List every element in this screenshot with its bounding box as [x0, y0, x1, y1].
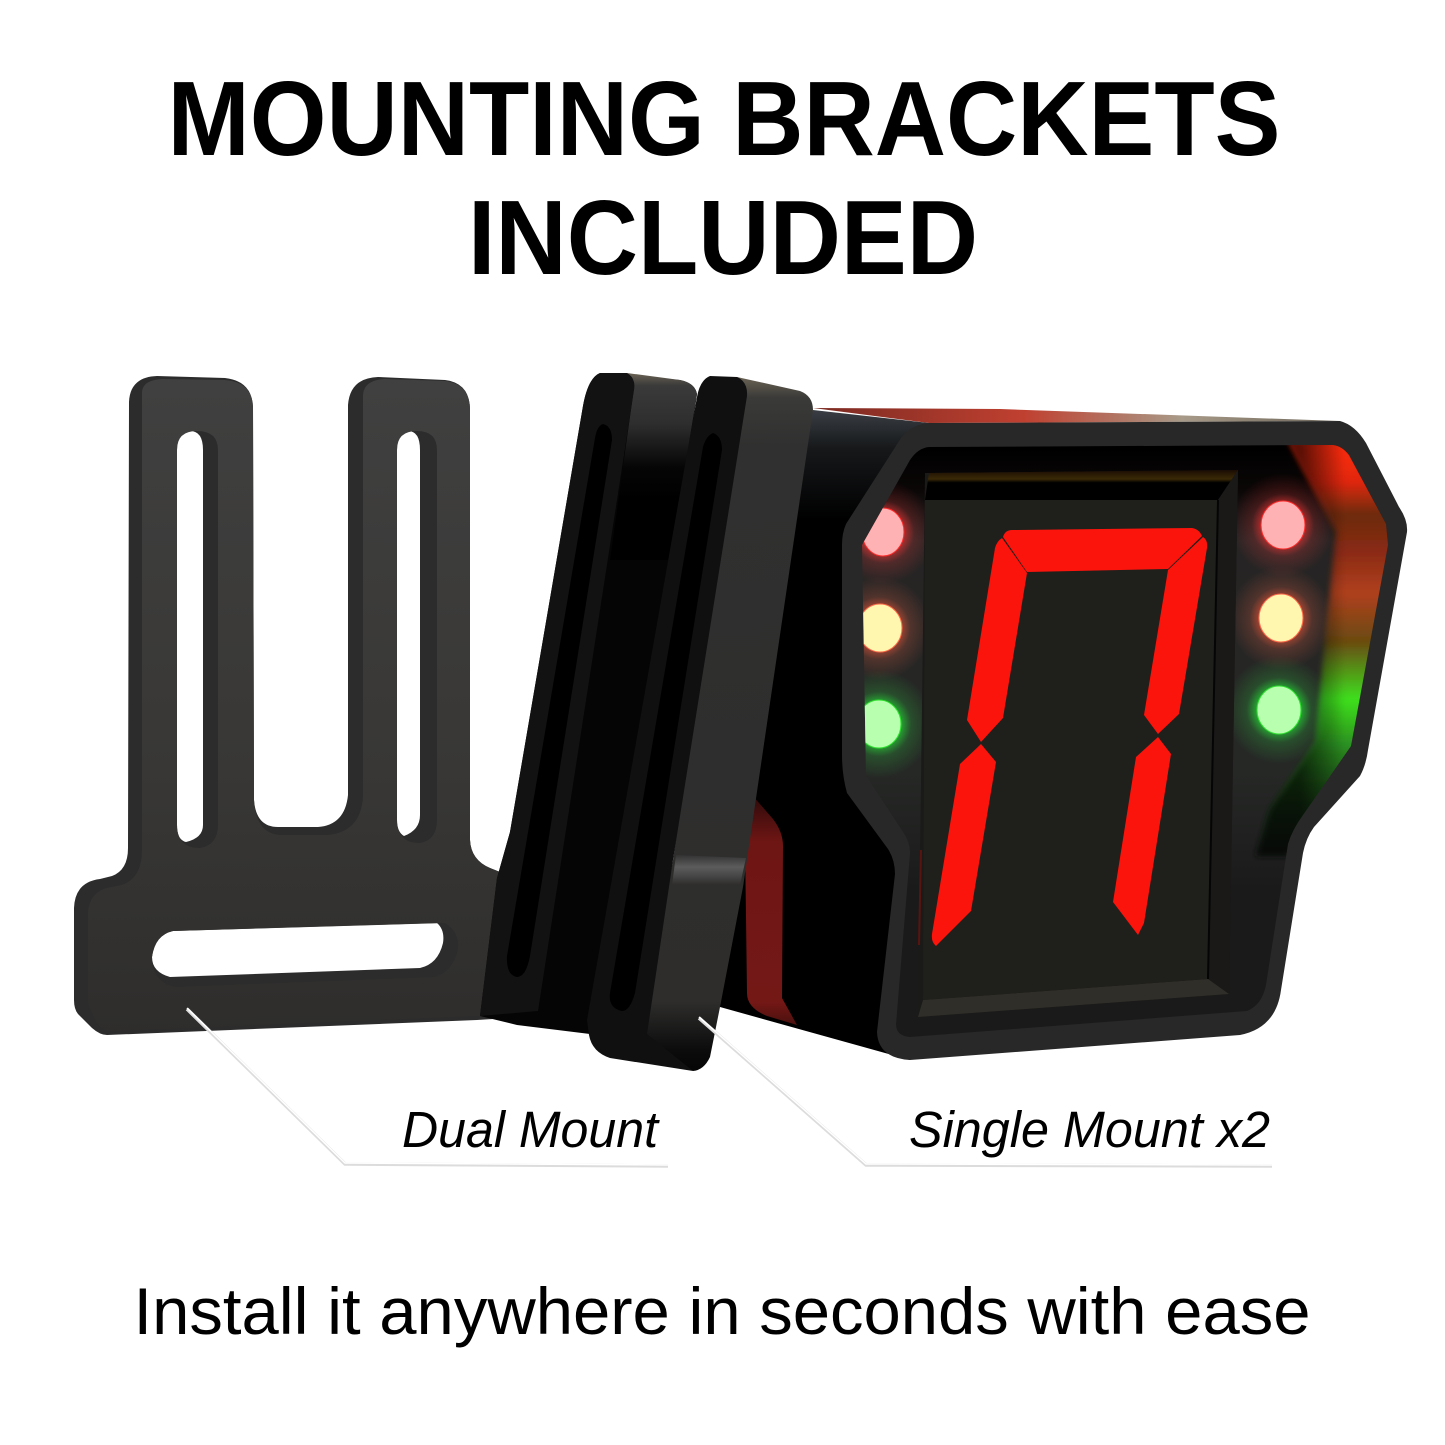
front single mount	[587, 376, 813, 1071]
front mount side	[640, 377, 813, 1071]
title	[168, 60, 1280, 297]
front mount face	[587, 376, 747, 1071]
single mount brackets	[480, 373, 813, 1071]
bracket edge	[74, 376, 510, 1035]
seven-segment digit 7	[932, 528, 1207, 946]
callout: single mount x2	[699, 1017, 1272, 1166]
front mount highlight	[672, 855, 746, 885]
leader line	[187, 1008, 668, 1166]
right LEDs	[1257, 501, 1305, 734]
front mount slot	[610, 433, 722, 1011]
front bezel	[842, 421, 1407, 1060]
coloured light channel	[1270, 445, 1388, 814]
dual mount bracket	[74, 376, 510, 1035]
rear mount slot	[507, 424, 612, 977]
device body side	[700, 410, 960, 1060]
inner recess and lights	[862, 445, 1388, 1037]
callout: dual mount: Dual Mount	[402, 1101, 660, 1158]
red side stripe	[745, 796, 797, 1025]
callout: single mount x2: Single Mount x2	[909, 1101, 1270, 1158]
tagline: Install it anywhere in seconds with ease	[134, 1274, 1310, 1348]
left LEDs	[863, 508, 904, 748]
bracket face	[88, 379, 510, 1031]
callout: dual mount	[187, 1008, 668, 1166]
right LED glows	[1234, 476, 1330, 760]
display window	[918, 470, 1238, 1017]
recess panel	[884, 445, 1363, 1037]
title: MOUNTING BRACKETS	[168, 60, 1280, 178]
left LED glows	[862, 486, 924, 774]
title: INCLUDED	[468, 179, 978, 297]
rear single mount	[480, 373, 697, 1034]
device top strip	[813, 408, 1340, 423]
leader line	[699, 1017, 1272, 1166]
device: gear indicator	[700, 408, 1410, 1060]
